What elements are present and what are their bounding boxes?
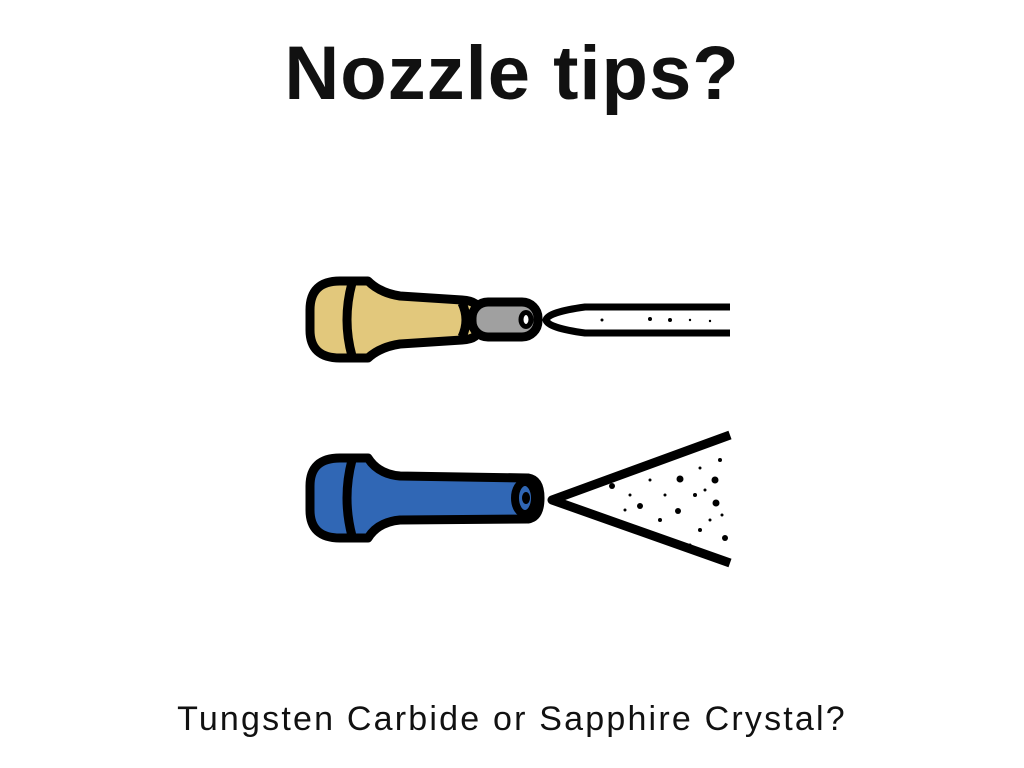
icon: tungsten carbide nozzle with narrow jet xyxy=(310,281,730,358)
icon: sapphire crystal nozzle with wide spray xyxy=(310,435,730,563)
title: Nozzle tips? xyxy=(284,31,740,116)
spray particles xyxy=(600,317,728,546)
subtitle: Tungsten Carbide or Sapphire Crystal? xyxy=(177,700,847,738)
